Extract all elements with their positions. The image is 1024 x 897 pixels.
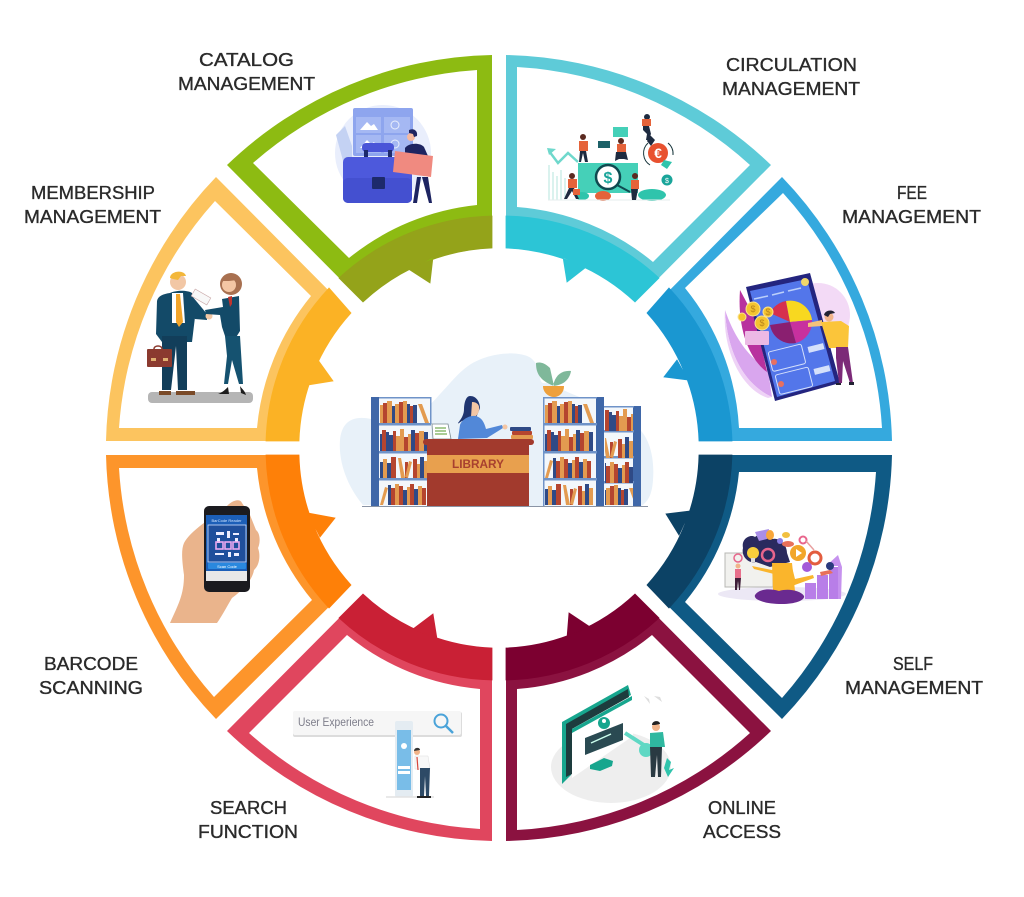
label: MANAGEMENT xyxy=(842,207,981,227)
inner band with arrow xyxy=(339,594,492,680)
label: MANAGEMENT xyxy=(24,207,161,227)
label: MANAGEMENT xyxy=(178,74,315,94)
label: MEMBERSHIP xyxy=(31,183,155,203)
reception desk xyxy=(423,439,534,506)
label: MANAGEMENT xyxy=(722,79,860,99)
label: ONLINE xyxy=(708,798,776,818)
app title: BarCode Reader xyxy=(211,518,242,523)
label: BARCODE xyxy=(44,654,138,674)
inner band with arrow xyxy=(506,216,659,302)
label xyxy=(24,183,161,227)
segment frame xyxy=(106,177,351,441)
segment frame xyxy=(506,55,771,302)
label xyxy=(722,55,860,99)
icon: briefcase and man with folder xyxy=(335,105,433,203)
right bookshelves xyxy=(543,397,651,507)
segment frame xyxy=(106,455,351,719)
label: MANAGEMENT xyxy=(845,678,983,698)
panel: membership management xyxy=(24,177,351,441)
desk sign text: LIBRARY xyxy=(452,457,504,471)
segment frame xyxy=(647,177,892,441)
left bookshelf xyxy=(371,397,432,506)
label xyxy=(198,798,298,842)
inner band with arrow xyxy=(647,455,732,608)
inner band with arrow xyxy=(266,288,351,441)
librarian xyxy=(458,396,508,439)
label: SELF xyxy=(893,654,933,674)
segment frame xyxy=(227,594,492,841)
icon: monitor with key and man xyxy=(551,685,674,803)
icon: tablet with pie chart and man xyxy=(725,273,854,401)
label: SCANNING xyxy=(39,678,143,698)
label: ACCESS xyxy=(703,822,781,842)
background blob xyxy=(340,353,653,507)
label xyxy=(703,798,781,842)
scan button text: Scan Code xyxy=(217,564,238,569)
panel: search function xyxy=(198,594,492,842)
plant xyxy=(536,362,571,397)
panel: self management xyxy=(647,455,983,719)
icon: people around banknote: $ xyxy=(665,178,669,185)
segment frame xyxy=(647,455,892,719)
inner band with arrow xyxy=(339,216,492,302)
panel: barcode scanning xyxy=(39,455,351,719)
icon: people around banknote: € xyxy=(654,145,662,161)
icon: tablet with pie chart and man: $ xyxy=(765,307,771,317)
icon: tablet with pie chart and man: $ xyxy=(759,318,765,328)
panel: circulation management xyxy=(506,55,860,302)
panel: catalog management xyxy=(178,50,492,302)
icon: people around banknote: $ xyxy=(604,170,613,187)
segment frame xyxy=(227,55,492,302)
label: FUNCTION xyxy=(198,822,298,842)
desk sign and books xyxy=(432,424,533,439)
inner band with arrow xyxy=(647,288,732,441)
label xyxy=(39,654,143,698)
inner band with arrow xyxy=(266,455,351,608)
search bar text: User Experience xyxy=(298,717,374,729)
icon: search bar and man at phone xyxy=(293,711,462,798)
label: FEE xyxy=(897,183,927,203)
label: CIRCULATION xyxy=(726,55,857,75)
icon: tablet with pie chart and man: $ xyxy=(750,304,756,314)
center illustration: library xyxy=(340,353,653,507)
panel: online access xyxy=(506,594,781,842)
icon: people around banknote xyxy=(547,114,673,201)
label xyxy=(178,50,315,94)
label: SEARCH xyxy=(210,798,287,818)
segment frame xyxy=(506,594,771,841)
floor line xyxy=(362,506,648,508)
label xyxy=(845,654,983,698)
icon: meditating person with ideas xyxy=(718,529,846,604)
panel: fee management xyxy=(647,177,981,441)
icon: business people shaking hands xyxy=(147,272,253,403)
icon: hand holding phone with QR code xyxy=(170,500,260,623)
label xyxy=(842,183,981,227)
label: CATALOG xyxy=(199,50,294,70)
inner band with arrow xyxy=(506,594,659,680)
